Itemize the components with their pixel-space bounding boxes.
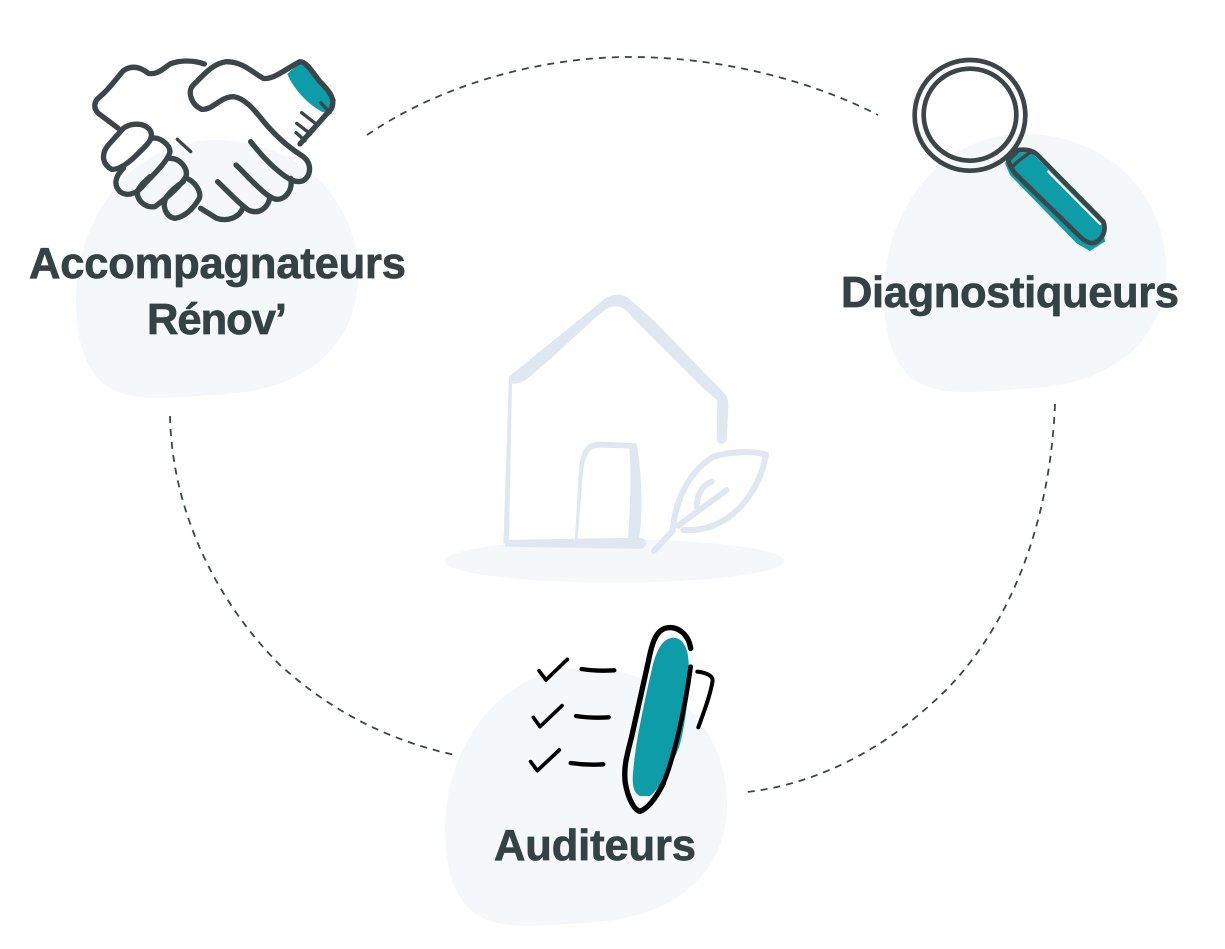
label: Accompagnateurs Rénov': Accompagnateurs bbox=[29, 240, 406, 288]
blob: Accompagnateurs background bbox=[76, 140, 358, 398]
label: Diagnostiqueurs: Diagnostiqueurs bbox=[841, 269, 1179, 317]
dashed arc: Auditeurs to Accompagnateurs bbox=[170, 416, 455, 755]
right hand outline bbox=[190, 62, 333, 182]
door bbox=[575, 442, 641, 539]
fingers, right hand bbox=[236, 165, 291, 199]
handle outline bbox=[1008, 150, 1105, 243]
check 3 bbox=[531, 750, 559, 771]
dashed arc: Diagnostiqueurs to Auditeurs bbox=[747, 404, 1055, 792]
label: Accompagnateurs Rénov' bbox=[29, 240, 406, 344]
fingers, left hand bbox=[104, 124, 152, 169]
handle highlight bbox=[1047, 170, 1102, 225]
pen teal body bbox=[633, 638, 689, 796]
icon: magnifying glass bbox=[915, 60, 1105, 251]
pen clip bbox=[697, 672, 713, 727]
check 2 bbox=[533, 706, 562, 727]
lens inner ring bbox=[924, 69, 1016, 161]
handle collar bbox=[1013, 153, 1030, 166]
icon: checklist with pen bbox=[531, 628, 713, 811]
house left wall bbox=[503, 377, 512, 543]
icon: handshake bbox=[95, 61, 336, 220]
label: Accompagnateurs Rénov': Rénov’ bbox=[147, 296, 287, 344]
blob: Diagnostiqueurs background bbox=[884, 134, 1166, 392]
line 1 bbox=[582, 669, 614, 671]
leaf bbox=[654, 452, 766, 551]
pen right edge bbox=[663, 667, 691, 783]
label: Auditeurs: Auditeurs bbox=[494, 822, 696, 870]
icon: central house with leaf bbox=[444, 295, 784, 583]
check 1 bbox=[539, 659, 567, 680]
dashed arc: Accompagnateurs to Diagnostiqueurs bbox=[367, 57, 878, 135]
line 2 bbox=[576, 716, 609, 718]
small crease bbox=[177, 139, 191, 152]
teal cuff bbox=[287, 61, 336, 113]
line 3 bbox=[571, 763, 603, 765]
house base bbox=[504, 538, 646, 549]
lens outer ring bbox=[915, 60, 1025, 171]
house roof and right wall bbox=[509, 295, 728, 444]
handle teal shadow bbox=[1005, 152, 1105, 251]
blob: Auditeurs background bbox=[445, 668, 727, 926]
left hand outline bbox=[95, 61, 204, 128]
ground shadow bbox=[444, 539, 784, 583]
pen outline bbox=[625, 628, 691, 811]
cuff ticks bbox=[296, 103, 330, 141]
